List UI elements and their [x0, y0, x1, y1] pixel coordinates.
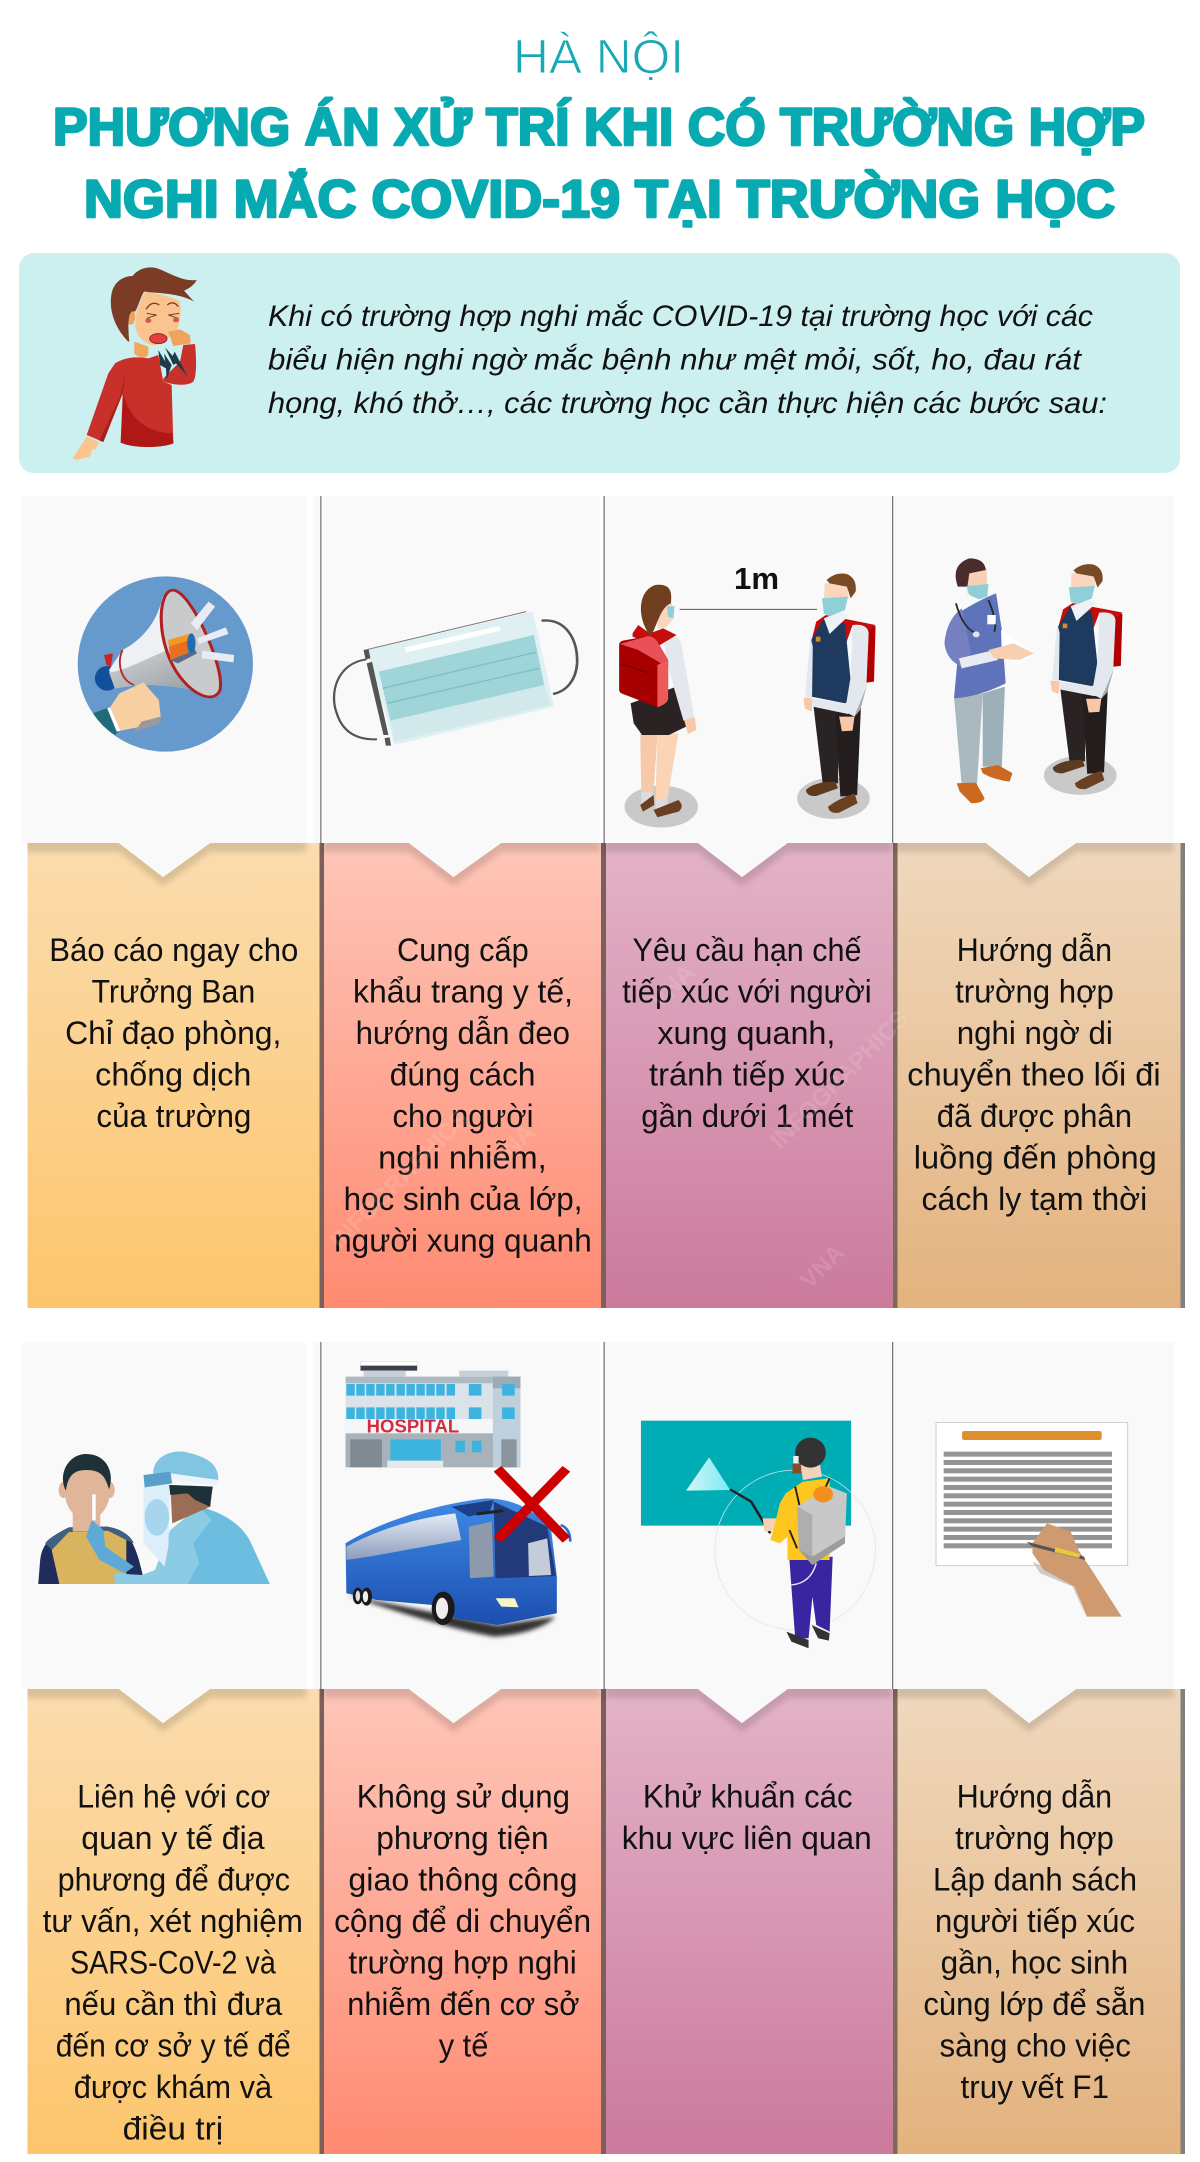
icon: list document and writing hand	[936, 1423, 1128, 1617]
icon: disinfection worker	[641, 1421, 876, 1648]
hospital building	[346, 1362, 520, 1467]
step text row 2 column 3: khu vực liên quan	[622, 1820, 872, 1856]
intro text: họng, khó thở…, các trường học cần thực hiện các bước sau:	[268, 387, 1107, 420]
step text row 1 column 4: nghi ngờ di	[957, 1015, 1113, 1051]
step text row 2 column 2: phương tiện	[376, 1820, 549, 1856]
step text row 1 column 2: đúng cách	[390, 1056, 535, 1092]
step text row 1 column 3	[622, 932, 872, 1134]
step text row 1 column 4: Hướng dẫn	[957, 932, 1112, 968]
step text row 1 column 3: gần dưới 1 mét	[641, 1098, 853, 1134]
intro text: biểu hiện nghi ngờ mắc bệnh như mệt mỏi, sốt, ho, đau rát	[268, 344, 1083, 376]
step text row 1 column 2: Cung cấp	[397, 932, 529, 968]
step text row 1 column 3: tránh tiếp xúc	[649, 1056, 845, 1092]
step text row 2 column 4: sàng cho việc	[940, 2028, 1131, 2064]
step text row 1 column 2: người xung quanh	[334, 1222, 592, 1258]
step text row 2 column 1	[43, 1779, 303, 2147]
step text row 2 column 4: Lập danh sách	[933, 1862, 1137, 1898]
hospital sign: HOSPITAL	[367, 1416, 459, 1437]
step text row 2 column 2: Không sử dụng	[357, 1779, 570, 1815]
icon: coughing man	[73, 267, 197, 460]
intro banner	[19, 253, 1180, 473]
panel row 2	[22, 1342, 1185, 2154]
step text row 1 column 2: cho người	[392, 1098, 534, 1134]
step text row 1 column 1: Trưởng Ban	[92, 974, 255, 1010]
step text row 1 column 2: nghi nhiễm,	[378, 1140, 547, 1176]
step text row 2 column 2: cộng để di chuyển	[334, 1903, 591, 1939]
step text row 1 column 4: trường hợp	[955, 974, 1114, 1010]
step text row 1 column 1: Chỉ đạo phòng,	[65, 1015, 281, 1051]
watermark: INFOGRAPHICS	[765, 1005, 914, 1154]
step text row 2 column 1: đến cơ sở y tế để	[56, 2028, 291, 2064]
step text row 1 column 4: chuyển theo lối đi	[907, 1056, 1161, 1092]
icon: doctor and student	[944, 558, 1122, 803]
step text row 2 column 2: trường hợp nghi	[348, 1945, 577, 1981]
heading: Hà Nội: HÀ NỘI	[513, 30, 684, 84]
step text row 1 column 2: hướng dẫn đeo	[356, 1015, 570, 1051]
step text row 1 column 4	[907, 932, 1161, 1217]
step text row 1 column 4: luồng đến phòng	[914, 1140, 1157, 1176]
main title: PHƯƠNG ÁN XỬ TRÍ KHI CÓ TRƯỜNG HỢP	[53, 97, 1145, 157]
doctor	[944, 558, 1036, 803]
icon: megaphone	[78, 576, 253, 752]
step text row 2 column 3	[622, 1779, 872, 1856]
step text row 2 column 1: quan y tế địa	[81, 1820, 265, 1856]
step text row 1 column 2: học sinh của lớp,	[344, 1181, 582, 1217]
step text row 1 column 1: chống dịch	[95, 1056, 251, 1092]
step text row 1 column 3: Yêu cầu hạn chế	[632, 932, 862, 968]
main title	[53, 97, 1145, 229]
icon: two students 1 metre apart	[619, 561, 876, 828]
panel row 1	[22, 496, 1185, 1308]
intro text	[268, 300, 1107, 420]
step text row 1 column 3: tiếp xúc với người	[622, 974, 872, 1010]
main title: NGHI MẮC COVID-19 TẠI TRƯỜNG HỌC	[84, 168, 1115, 229]
icon: surgical mask	[334, 612, 577, 746]
step text row 2 column 4: trường hợp	[955, 1820, 1114, 1856]
step text row 2 column 2: nhiễm đến cơ sở	[347, 1986, 579, 2022]
step text row 1 column 1: Báo cáo ngay cho	[49, 932, 298, 968]
step text row 1 column 3: xung quanh,	[657, 1015, 835, 1051]
step text row 2 column 4: người tiếp xúc	[935, 1903, 1135, 1939]
icon: nasal swab test	[38, 1451, 270, 1584]
step text row 2 column 1: được khám và	[74, 2069, 272, 2105]
step text row 1 column 1	[49, 932, 298, 1134]
step text row 1 column 2: khẩu trang y tế,	[353, 974, 573, 1010]
step text row 2 column 4: Hướng dẫn	[957, 1779, 1112, 1815]
step text row 2 column 1: phương để được	[58, 1862, 290, 1898]
step text row 2 column 4: gần, học sinh	[941, 1945, 1128, 1981]
icon: hospital and bus crossed out	[346, 1362, 570, 1637]
intro text: Khi có trường hợp nghi mắc COVID-19 tại trường học với các	[268, 300, 1093, 333]
step text row 2 column 1: nếu cần thì đưa	[64, 1986, 282, 2022]
distance label: 1m	[734, 561, 779, 596]
watermark	[325, 959, 914, 1294]
step text row 2 column 2	[334, 1779, 591, 2064]
step text row 2 column 2: giao thông công	[348, 1862, 578, 1898]
step text row 1 column 1: của trường	[96, 1098, 251, 1134]
girl student	[619, 585, 698, 828]
step text row 2 column 4	[923, 1779, 1145, 2105]
bus	[346, 1498, 570, 1637]
watermark: INFOGRAPHICS	[325, 1105, 474, 1254]
red cross	[494, 1466, 570, 1543]
step text row 2 column 1: tư vấn, xét nghiệm	[43, 1903, 303, 1939]
watermark: VNA	[485, 1119, 540, 1174]
step text row 2 column 1: SARS-CoV-2 và	[70, 1945, 276, 1981]
watermark: VNA	[795, 1239, 850, 1294]
step text row 2 column 4: truy vết F1	[960, 2069, 1109, 2105]
step text row 1 column 4: đã được phân	[937, 1098, 1132, 1134]
step text row 2 column 3: Khử khuẩn các	[643, 1779, 853, 1815]
step text row 1 column 4: cách ly tạm thời	[922, 1181, 1147, 1217]
watermark: VNA	[645, 959, 700, 1014]
step text row 2 column 1: Liên hệ với cơ	[77, 1779, 270, 1815]
step text row 2 column 2: y tế	[439, 2028, 489, 2064]
step text row 1 column 2	[334, 932, 592, 1258]
step text row 2 column 4: cùng lớp để sẵn	[923, 1986, 1145, 2022]
step text row 2 column 1: điều trị	[123, 2111, 223, 2147]
